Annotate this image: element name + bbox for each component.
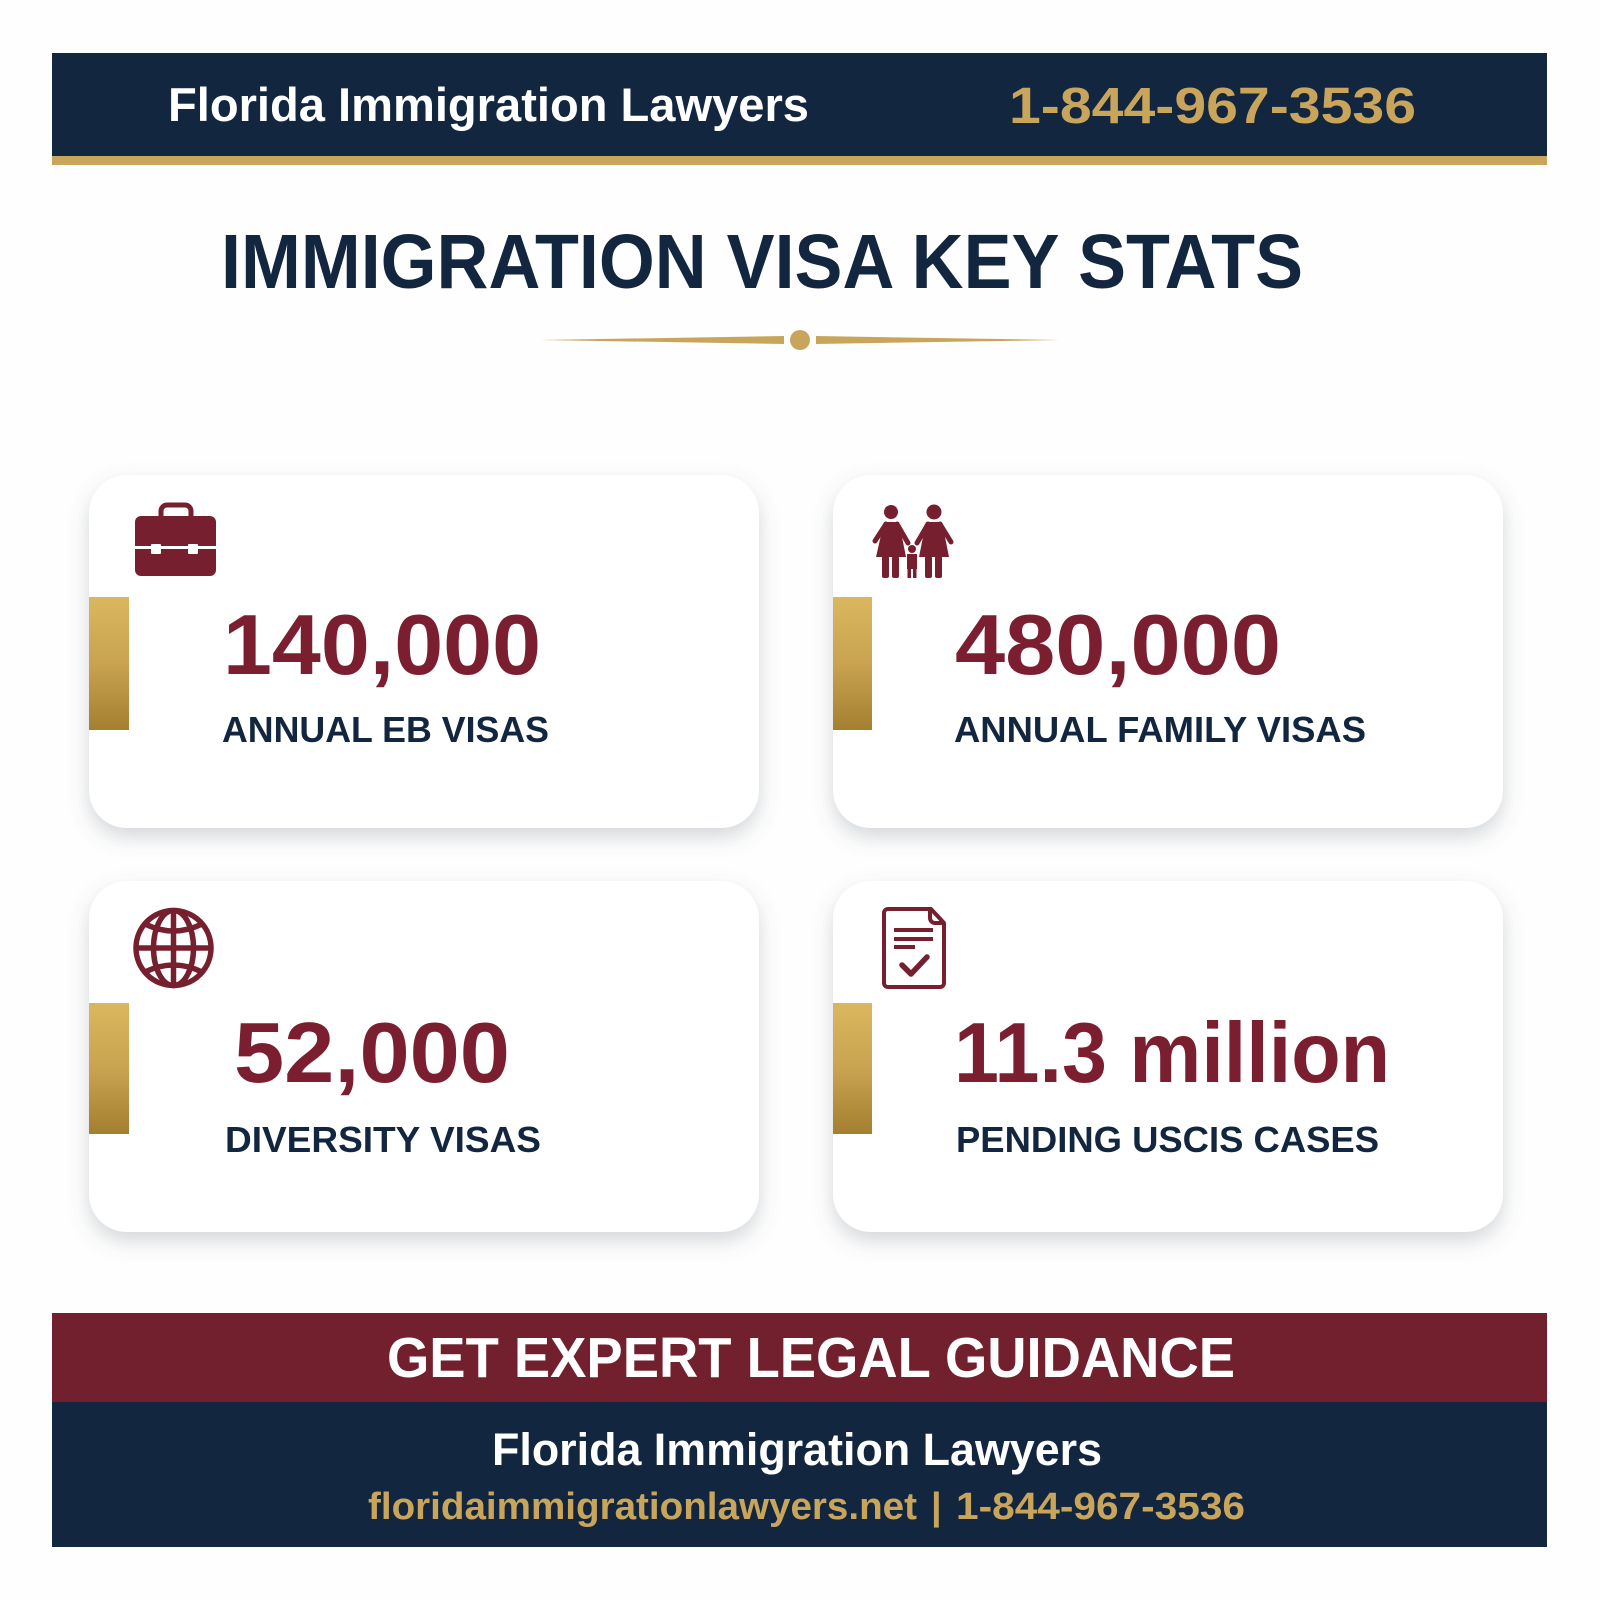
header firm name: Florida Immigration Lawyers	[168, 78, 809, 131]
footer firm name: Florida Immigration Lawyers	[492, 1424, 1102, 1475]
stat number: 140,000	[223, 598, 541, 693]
icon: checklist document	[884, 909, 944, 987]
stat label: ANNUAL FAMILY VISAS	[954, 709, 1366, 750]
call to action heading: GET EXPERT LEGAL GUIDANCE	[387, 1326, 1235, 1390]
stat label: DIVERSITY VISAS	[225, 1119, 541, 1160]
title divider ornament	[541, 330, 1059, 350]
stat number: 480,000	[955, 598, 1281, 693]
footer website and phone: 1-844-967-3536	[956, 1486, 1245, 1528]
header phone number: 1-844-967-3536	[1009, 77, 1416, 134]
call to action band	[52, 1313, 1547, 1403]
gold accent bar	[89, 597, 129, 730]
panel: diversity visas	[89, 881, 759, 1232]
stat number: 52,000	[234, 1006, 510, 1101]
panel: family visas	[833, 475, 1503, 828]
panel: pending cases	[833, 881, 1503, 1232]
gold accent bar	[89, 1003, 129, 1134]
icon: family	[875, 504, 951, 578]
stat number: 11.3 million	[954, 1006, 1390, 1101]
header banner	[52, 53, 1547, 165]
footer website and phone: floridaimmigrationlawyers.net	[368, 1486, 917, 1528]
title: IMMIGRATION VISA KEY STATS	[221, 219, 1303, 305]
footer website and phone	[368, 1486, 1245, 1528]
icon: briefcase	[135, 505, 216, 576]
footer contact band	[52, 1402, 1547, 1547]
icon: globe	[136, 910, 211, 986]
gold accent bar	[833, 1003, 872, 1134]
stat label: ANNUAL EB VISAS	[222, 709, 549, 750]
panel: EB visas	[89, 475, 759, 828]
footer website and phone: |	[931, 1486, 942, 1528]
stat label: PENDING USCIS CASES	[956, 1119, 1379, 1160]
gold accent bar	[833, 597, 872, 730]
